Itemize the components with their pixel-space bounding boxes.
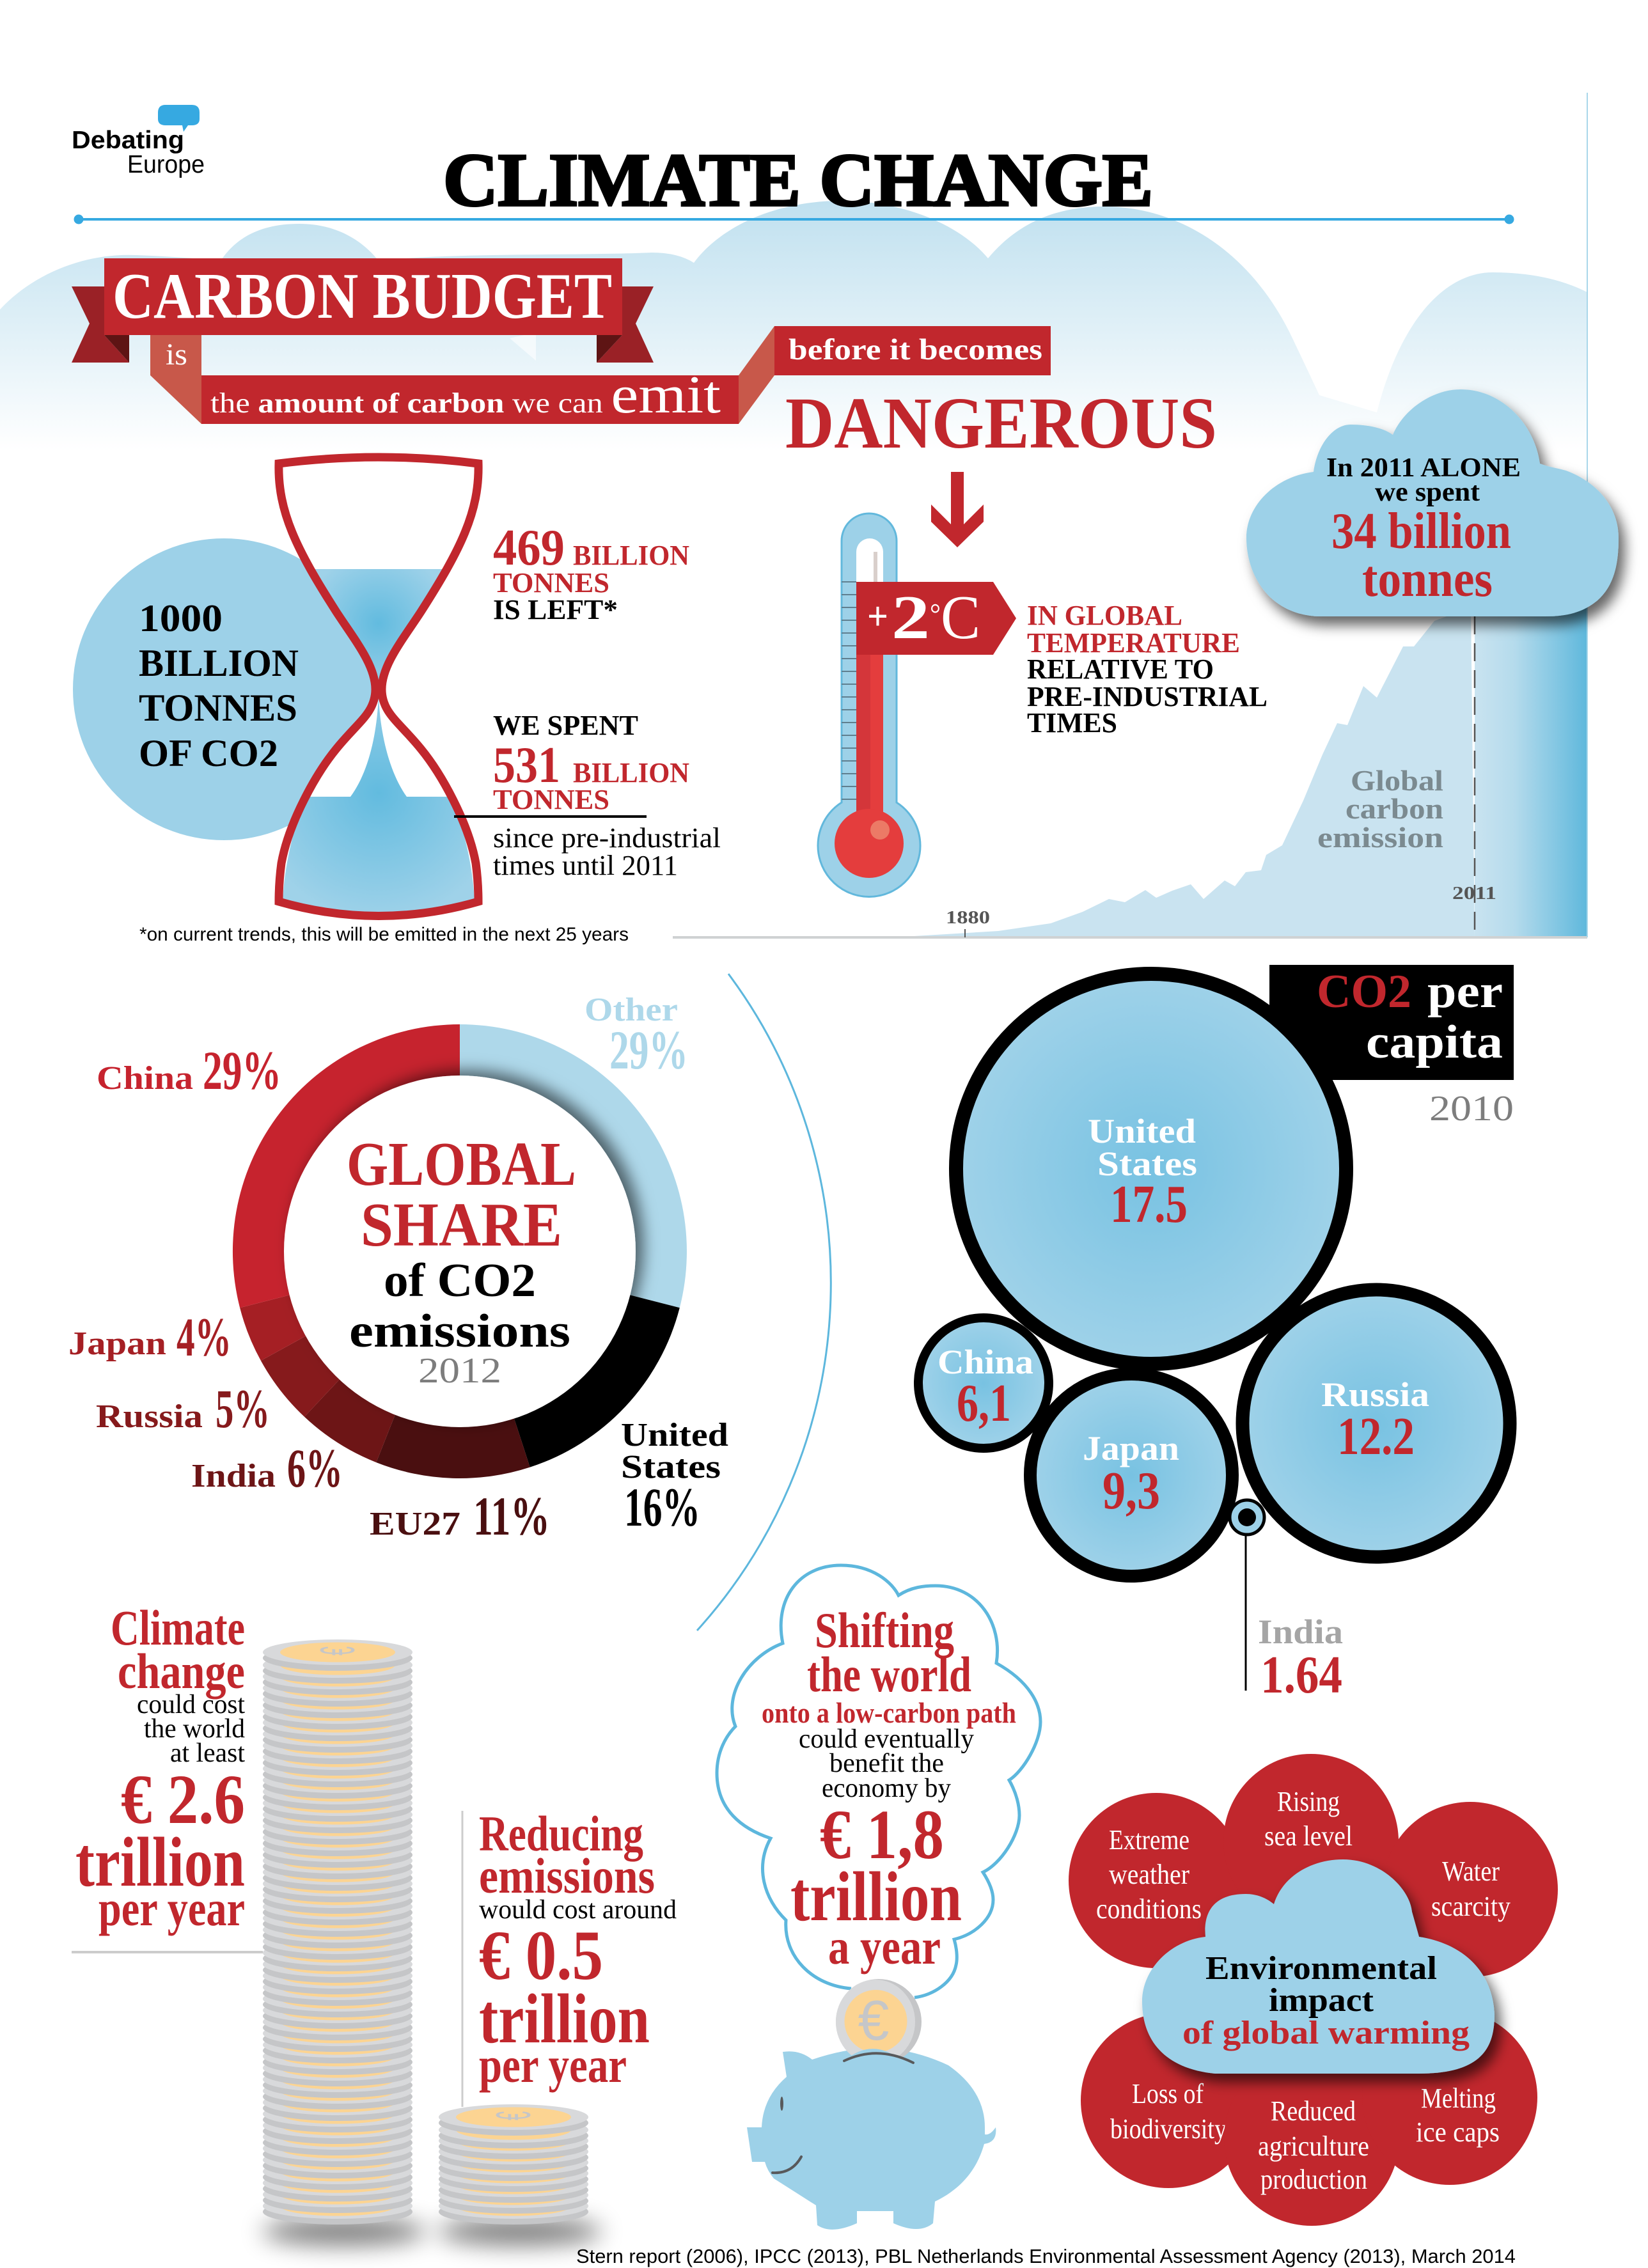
text: we spent 531 billion tonnes: 531 <box>493 737 560 794</box>
text: reducing emissions: would cost around <box>479 1895 677 1925</box>
cloud: shifting the world: € 1,8 <box>820 1795 944 1873</box>
label russia: Russia <box>96 1398 203 1435</box>
panel: CO2 per capita heading: CO2 <box>1317 966 1411 1018</box>
bubble russia <box>1243 1290 1510 1557</box>
logo word Europe: Europe <box>127 151 205 178</box>
panel: CO2 per capita heading: capita <box>1366 1016 1503 1068</box>
bubble china <box>918 1318 1049 1448</box>
text: 469 billion tonnes left: TONNES <box>493 567 609 598</box>
value india: 6% <box>287 1437 343 1499</box>
petal: melting ice caps <box>1362 2010 1537 2185</box>
text: we spent 531 billion tonnes <box>454 710 721 881</box>
bubble russia: Russia <box>1321 1375 1429 1414</box>
bubble india: 1.64 <box>1260 1645 1342 1705</box>
petal: extreme weather: weather <box>1109 1859 1189 1890</box>
bubble japan: 9,3 <box>1103 1461 1160 1521</box>
icon: euro coin: € <box>858 1989 889 2052</box>
label global carbon emission <box>1317 764 1443 854</box>
donut labels <box>68 992 728 1547</box>
coin stack: 0.5 trillion <box>439 2104 588 2225</box>
source line: Stern report (2006), IPCC (2013), PBL Netherlands Environmental Assessment Agency (2013), March 2014 <box>576 2245 1516 2267</box>
logo word Debating: Debating <box>72 127 184 154</box>
bubble china: 6,1 <box>957 1373 1011 1433</box>
text: we spent 531 billion tonnes: times until 2011 <box>493 850 678 881</box>
petal: extreme weather <box>1069 1793 1244 1968</box>
1000 billion label <box>139 597 299 774</box>
petal: rising sea level: Rising <box>1277 1786 1340 1817</box>
text: reducing emissions: emissions <box>479 1848 655 1904</box>
title: CLIMATE CHANGE <box>443 138 1153 222</box>
segment other <box>460 1024 687 1308</box>
text: we spent 531 billion tonnes: BILLION <box>573 757 689 788</box>
circle: 1000 billion tonnes <box>73 538 375 840</box>
label 1880: 1880 <box>946 907 990 928</box>
petal: water scarcity <box>1383 1802 1558 1977</box>
bubble united states <box>956 974 1346 1364</box>
bubble india: India <box>1258 1613 1343 1651</box>
shadow under coin stacks <box>262 2217 602 2246</box>
bubble united states: States <box>1097 1145 1197 1183</box>
vertical rule <box>462 1811 463 2107</box>
cloud: shifting the world <box>717 1565 1040 1998</box>
text: in global temperature: PRE-INDUSTRIAL <box>1027 681 1267 712</box>
bubble chart: per capita <box>918 974 1510 1705</box>
label EU27: EU27 <box>370 1506 460 1542</box>
text: we spent 531 billion tonnes: TONNES <box>493 784 609 815</box>
text: climate change could cost: trillion <box>75 1823 245 1901</box>
cloud: 34 billion tonnes: tonnes <box>1362 551 1493 607</box>
bubble india <box>1230 1500 1343 1705</box>
text: in global temperature: RELATIVE TO <box>1027 653 1214 685</box>
text: in global temperature: TIMES <box>1027 707 1117 739</box>
chart: global carbon emission <box>673 93 1587 937</box>
petal: melting ice caps: Melting <box>1421 2083 1496 2114</box>
label united states: 16% <box>624 1476 700 1538</box>
cloud: 34 billion tonnes <box>1246 389 1619 616</box>
arrow down <box>931 472 984 547</box>
heading: dangerous: DANGEROUS <box>785 382 1217 464</box>
coin stack: 0.5 trillion: € <box>487 2111 540 2120</box>
1000 billion label: BILLION <box>139 642 299 684</box>
petal: melting ice caps: ice caps <box>1416 2116 1500 2148</box>
cloud: shifting the world: trillion <box>790 1857 962 1936</box>
cloud: environmental impact: of global warming <box>1182 2015 1470 2051</box>
tag: +2 degrees C: 2 <box>891 583 930 652</box>
text: we spent 531 billion tonnes: WE SPENT <box>493 710 638 741</box>
icon: piggy bank <box>747 1979 996 2230</box>
petal: loss of biodiversity: biodiversity <box>1110 2113 1227 2145</box>
text: climate change could cost: € 2.6 <box>121 1760 245 1838</box>
donut centre text: SHARE <box>361 1191 562 1260</box>
thermometer <box>818 513 1016 896</box>
text: reducing emissions: per year <box>479 2037 627 2093</box>
background clouds <box>0 201 1587 454</box>
cloud: shifting the world: economy by <box>822 1774 951 1803</box>
cloud: shifting the world: could eventually <box>799 1724 974 1754</box>
hourglass <box>279 457 478 916</box>
text: 469 billion tonnes left: 469 <box>493 520 565 576</box>
logo: Debating Europe <box>72 105 205 178</box>
bubble japan: Japan <box>1083 1429 1179 1467</box>
cloud: environmental impact: Environmental <box>1205 1950 1437 1987</box>
label united states: States <box>621 1449 721 1485</box>
tag: +2 degrees C <box>856 582 1016 655</box>
value other: 29% <box>609 1019 688 1081</box>
cloud: shifting the world: a year <box>828 1919 941 1975</box>
label other: Other <box>585 992 678 1028</box>
petal: reduced agriculture: agriculture <box>1258 2131 1369 2162</box>
cloud: environmental impact: impact <box>1269 1982 1374 2019</box>
label global carbon emission: carbon <box>1346 792 1443 825</box>
text: 469 billion tonnes left <box>493 520 689 625</box>
bubble united states: United <box>1088 1112 1196 1150</box>
text: we spent 531 billion tonnes: since pre-industrial <box>493 822 721 854</box>
text: climate change could cost: the world <box>144 1714 245 1744</box>
petal: reduced agriculture: production <box>1260 2164 1367 2195</box>
1000 billion label: OF CO2 <box>139 732 278 774</box>
title rule <box>74 215 1514 224</box>
petal: loss of biodiversity <box>1081 2013 1256 2188</box>
label 2011: 2011 <box>1452 883 1496 903</box>
value china: 29% <box>203 1040 281 1101</box>
year 2010: 2010 <box>1429 1089 1514 1129</box>
cloud: shifting the world: onto a low-carbon path <box>762 1696 1016 1729</box>
label united states <box>621 1417 728 1538</box>
cloud: shifting the world: the world <box>807 1646 971 1702</box>
cloud: environmental impact <box>1142 1859 1495 2074</box>
petal: reduced agriculture: Reduced <box>1271 2095 1356 2127</box>
petal: extreme weather: Extreme <box>1109 1824 1189 1856</box>
text: reducing emissions <box>479 1806 677 2093</box>
segment japan <box>240 1251 460 1361</box>
environmental impact flower <box>1069 1754 1558 2226</box>
label japan: Japan <box>68 1326 166 1362</box>
divider curve <box>697 974 831 1631</box>
cloud: 34 billion tonnes: 34 billion <box>1331 503 1511 559</box>
value japan: 4% <box>177 1306 232 1368</box>
ribbon sentence: the amount of carbon we can emit <box>210 365 721 425</box>
value russia: 5% <box>216 1378 270 1439</box>
segment china <box>233 1024 460 1308</box>
segment russia <box>261 1251 460 1417</box>
coin stack: 2.6 trillion: € <box>311 1646 365 1655</box>
text: in global temperature: IN GLOBAL <box>1027 600 1182 631</box>
petal: reduced agriculture <box>1224 2051 1399 2226</box>
petal: loss of biodiversity: Loss of <box>1132 2078 1204 2109</box>
tag: +2 degrees C: ° <box>930 597 941 630</box>
text: climate change could cost: could cost <box>137 1690 245 1719</box>
text: reducing emissions: Reducing <box>479 1806 643 1861</box>
footnote: *on current trends, this will be emitted in the next 25 years <box>139 924 629 945</box>
cloud: shifting the world: benefit the <box>829 1749 944 1778</box>
bubble russia: 12.2 <box>1337 1407 1415 1466</box>
bubble china: China <box>938 1343 1033 1381</box>
label global carbon emission: Global <box>1351 764 1443 797</box>
bubble japan <box>1030 1374 1232 1576</box>
tag: +2 degrees C: + <box>867 593 888 639</box>
text: in global temperature: TEMPERATURE <box>1027 627 1240 659</box>
icon: speech bubble <box>158 105 200 132</box>
ribbon word is: is <box>166 338 187 371</box>
text: climate change could cost: at least <box>170 1739 245 1768</box>
text: climate change could cost: change <box>118 1643 245 1699</box>
donut centre text: 2012 <box>418 1351 501 1391</box>
text: in global temperature <box>1027 600 1267 739</box>
label china: China <box>97 1060 193 1097</box>
label india: India <box>191 1458 276 1494</box>
value EU27: 11% <box>473 1485 550 1547</box>
petal: water scarcity: Water <box>1442 1856 1500 1887</box>
donut centre text: GLOBAL <box>347 1130 576 1199</box>
donut centre text: emissions <box>349 1305 570 1357</box>
text: climate change could cost: Climate <box>111 1600 245 1655</box>
segment united states <box>460 1251 680 1467</box>
cloud: 34 billion tonnes: In 2011 ALONE <box>1326 453 1521 483</box>
petal: rising sea level: sea level <box>1264 1820 1353 1852</box>
text: reducing emissions: trillion <box>479 1980 650 2058</box>
cloud: 34 billion tonnes: we spent <box>1375 478 1480 507</box>
ribbon heading: CARBON BUDGET <box>113 260 612 332</box>
icon: euro coin <box>836 1979 922 2065</box>
label global carbon emission: emission <box>1317 821 1443 854</box>
label united states: United <box>621 1417 728 1453</box>
1000 billion label: 1000 <box>139 597 223 639</box>
segment EU27 <box>376 1251 530 1478</box>
segment india <box>304 1251 460 1462</box>
cloud: shifting the world: Shifting <box>815 1602 954 1658</box>
text: 469 billion tonnes left: IS LEFT* <box>493 594 618 625</box>
bubble united states: 17.5 <box>1110 1175 1188 1234</box>
ribbon: carbon budget <box>72 258 1051 425</box>
panel: CO2 per capita heading: per <box>1427 966 1503 1018</box>
petal: extreme weather: conditions <box>1096 1893 1202 1925</box>
1000 billion label: TONNES <box>139 687 297 729</box>
donut centre text: of CO2 <box>384 1255 536 1307</box>
text: reducing emissions: € 0.5 <box>479 1916 603 1994</box>
text: climate change could cost <box>75 1600 245 1936</box>
coin stack: 2.6 trillion <box>263 1639 412 2225</box>
donut chart: global share <box>233 1024 687 1478</box>
text: climate change could cost: per year <box>98 1881 245 1936</box>
petal: water scarcity: scarcity <box>1431 1891 1511 1922</box>
donut centre text <box>347 1130 576 1391</box>
panel: CO2 per capita heading <box>1269 965 1514 1080</box>
petal: rising sea level <box>1223 1754 1399 1929</box>
ribbon sentence end: before it becomes <box>789 333 1042 366</box>
text: 469 billion tonnes left: BILLION <box>573 540 689 571</box>
tag: +2 degrees C: C <box>941 583 980 652</box>
